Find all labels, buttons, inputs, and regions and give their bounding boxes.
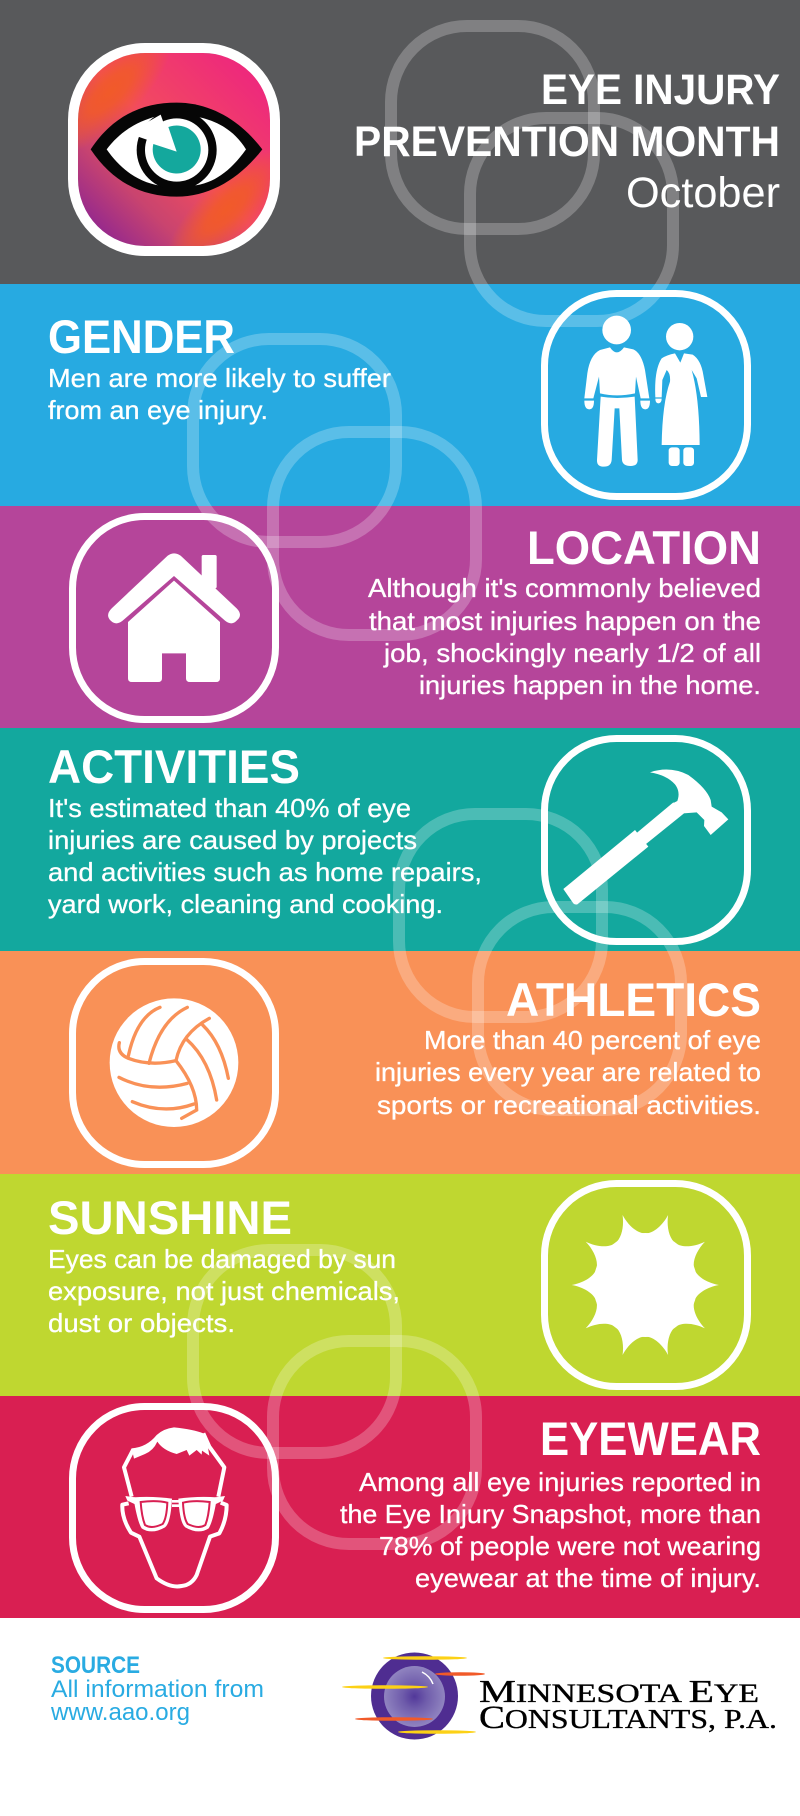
heading: ACTIVITIES [48,740,300,793]
panel: athletics [0,951,800,1174]
text block: injuries every year are related to [375,1057,761,1087]
title: PREVENTION MONTH [354,118,780,166]
title: October [626,169,780,217]
heading: ATHLETICS [506,973,761,1026]
text block: Among all eye injuries reported in [359,1467,761,1497]
text block: It's estimated than 40% of eye [48,793,411,823]
text block: Men are more likely to suffer [48,363,391,393]
icon: man and woman [544,294,748,496]
text block: from an eye injury. [48,395,268,425]
icon: house [72,516,276,720]
text block: the Eye Injury Snapshot, more than [340,1499,761,1529]
text block: dust or objects. [48,1308,235,1338]
text block: that most injuries happen on the [369,606,761,636]
heading: GENDER [48,310,235,363]
icon: volleyball [72,962,276,1164]
title [354,66,780,217]
footer: source: All information from [51,1676,264,1703]
text block [48,793,482,919]
text block: injuries are caused by projects [48,825,417,855]
logo: Minnesota Eye Consultants: M INNESOTA EYE [479,1673,759,1709]
text block: Although it's commonly believed [368,573,761,603]
footer: source: SOURCE [51,1652,140,1679]
text block: eyewear at the time of injury. [415,1563,761,1593]
panel: activities [0,728,800,951]
text block: sports or recreational activities. [377,1090,761,1120]
panel: sunshine [0,1174,800,1396]
text block: 78% of people were not wearing [379,1531,761,1561]
text block: job, shockingly nearly 1/2 of all [383,638,761,668]
text block: exposure, not just chemicals, [48,1276,400,1306]
text block: More than 40 percent of eye [424,1025,761,1055]
panel: eyewear [0,1396,800,1618]
text block: yard work, cleaning and cooking. [48,889,443,919]
panel: location [0,506,800,728]
text block [375,1025,761,1120]
text block: injuries happen in the home. [419,670,761,700]
text block [340,1467,761,1593]
decorative overlapping rounded rings [193,26,681,1544]
footer: source [50,1652,264,1726]
text block [48,1244,400,1338]
icon: eye [68,43,280,256]
heading: LOCATION [527,521,761,574]
heading: EYEWEAR [540,1412,761,1465]
icon: face with safety goggles [72,1406,276,1610]
panel: header [0,0,800,286]
text block [48,363,391,425]
panel: gender [0,284,800,506]
logo: Minnesota Eye Consultants [342,1652,777,1740]
text block: Eyes can be damaged by sun [48,1244,396,1274]
text block [368,573,761,700]
footer: source: www.aao.org [50,1699,190,1726]
icon: hammer [544,738,748,942]
text block: and activities such as home repairs, [48,857,482,887]
heading: SUNSHINE [48,1191,292,1244]
icon: sun [544,1184,748,1386]
logo: Minnesota Eye Consultants: CONSULTANTS, P.A. [479,1700,777,1736]
title: EYE INJURY [541,66,780,114]
